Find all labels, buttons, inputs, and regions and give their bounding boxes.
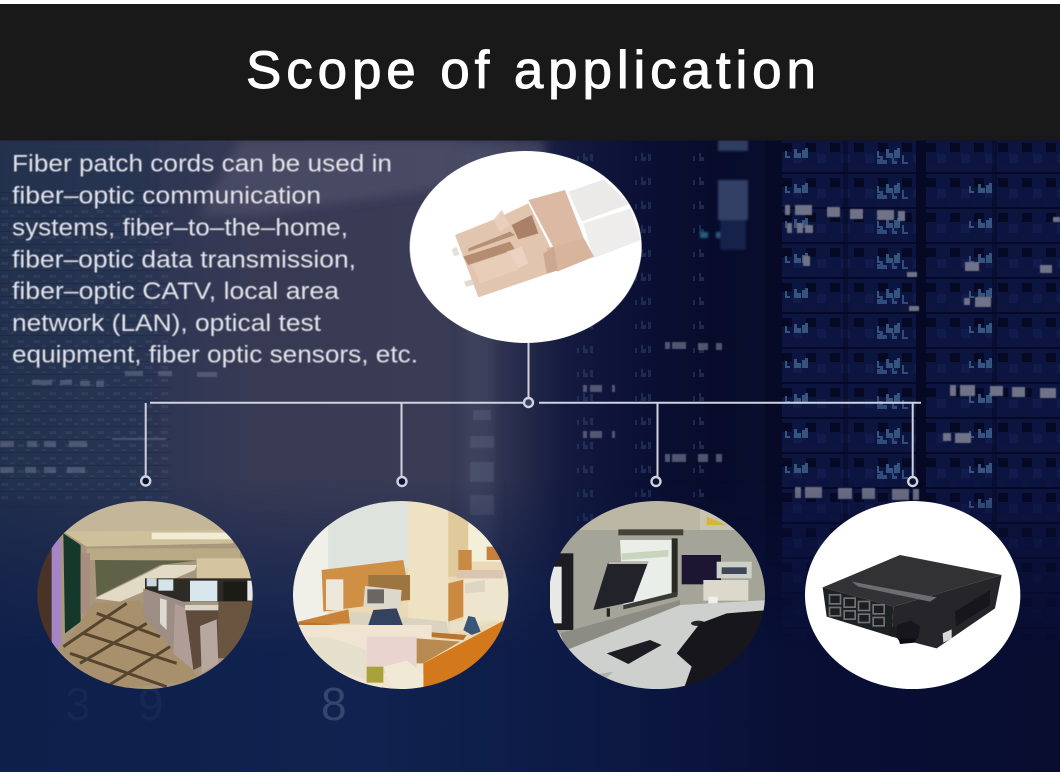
photo circle: control room desk with monitors: [547, 500, 770, 690]
bottom navy fade: [0, 480, 1060, 772]
description text block: equipment, fiber optic sensors, etc.: [12, 342, 418, 369]
description text block: systems, fiber–to–the–home,: [12, 214, 348, 242]
centre column blocks: [470, 410, 494, 515]
bottom white strip: [0, 772, 1060, 781]
photo circle: office with computers and staircase: [33, 497, 260, 693]
description text block: fiber–optic data transmission,: [12, 246, 356, 274]
title: Scope of application: [246, 41, 816, 100]
connector tree lines: [141, 343, 921, 486]
header band: [0, 4, 1060, 140]
faint background numbers: 3: [65, 678, 91, 730]
faint background numbers: 9: [138, 678, 164, 730]
bright column: [700, 140, 748, 250]
right rack grey blocks: [785, 205, 1060, 500]
description text block: fiber–optic communication: [12, 182, 321, 210]
right racks: [782, 140, 1060, 640]
product photo: LC fiber connector: [410, 151, 642, 343]
photo circle: black fiber media converter switch: [805, 501, 1020, 689]
middle faint rack marks: [575, 150, 705, 530]
description text block: Fiber patch cords can be used in: [12, 151, 392, 178]
faint background numbers: 8: [321, 678, 347, 730]
left small indicator blocks: [0, 371, 217, 473]
left grey building shape: [0, 140, 545, 550]
description text block: network (LAN), optical test: [12, 310, 321, 337]
faint background numbers: [65, 678, 347, 730]
description text block: fiber–optic CATV, local area: [12, 278, 339, 305]
description text block: [12, 151, 418, 369]
photo circle: office cubicle with CRT monitor: [292, 500, 512, 690]
